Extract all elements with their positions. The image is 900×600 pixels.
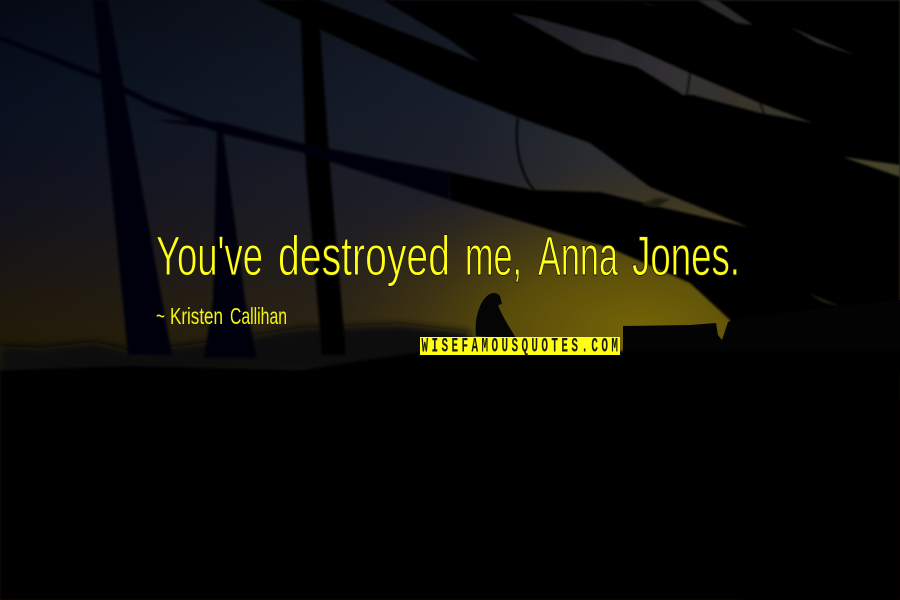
silhouette: poles and branches bbox=[0, 0, 450, 358]
author attribution bbox=[156, 303, 287, 329]
quote text bbox=[156, 224, 740, 287]
silhouette: rooftops bbox=[623, 300, 900, 372]
watermark badge: WISEFAMOUSQUOTES.COM bbox=[422, 335, 621, 358]
quote text: You've bbox=[156, 224, 263, 287]
frond gap: upper lit panel bbox=[510, 13, 813, 123]
quote text: Anna bbox=[538, 224, 619, 287]
quote text: Jones. bbox=[632, 224, 740, 287]
author attribution: Kristen bbox=[170, 303, 223, 329]
frond gap: details in large lit panel bbox=[517, 118, 670, 208]
quote text: destroyed bbox=[278, 224, 450, 287]
foreground: dark ground bbox=[0, 350, 900, 600]
silhouette: palm fronds bbox=[257, 0, 900, 600]
author attribution: ~ bbox=[156, 303, 165, 329]
author attribution: Callihan bbox=[230, 303, 287, 329]
frond gaps: small slivers bbox=[627, 0, 900, 307]
silhouette: distant hills bbox=[0, 324, 470, 372]
silhouette: perched bird bbox=[476, 293, 517, 340]
quote text: me, bbox=[465, 224, 522, 287]
